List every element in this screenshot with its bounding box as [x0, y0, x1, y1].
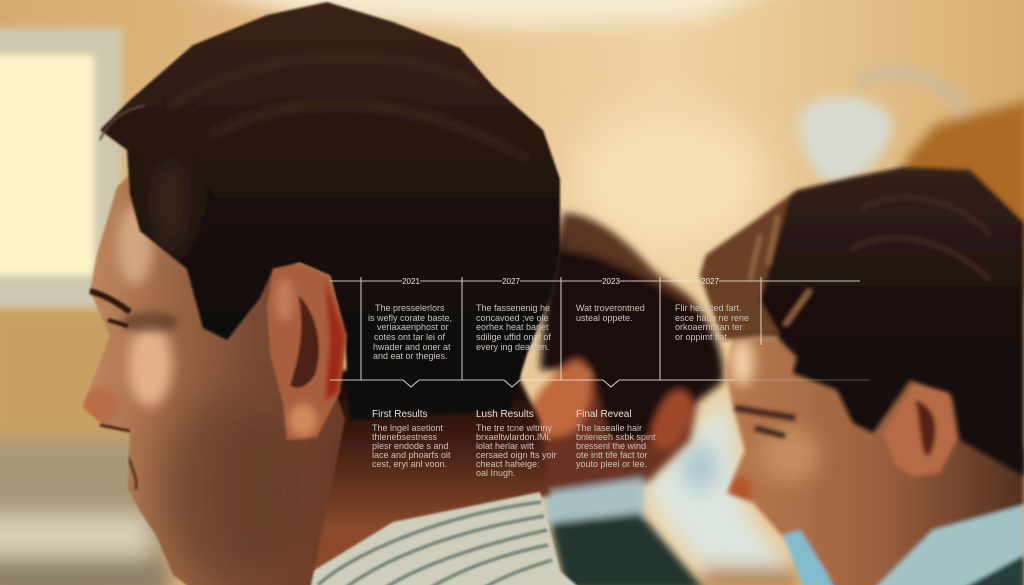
result 2: Lush Results: cheact haheige:	[476, 459, 540, 469]
hair	[700, 167, 1024, 476]
result 2: Lush Results: oal Inugh.	[476, 468, 516, 478]
result 1: First Results: lace and phoarfs oit	[372, 450, 451, 460]
person: right, profile	[700, 167, 1024, 585]
ear	[883, 383, 957, 477]
year 4: 2027	[701, 277, 719, 286]
result 2: Lush Results: lolat herlar witt	[476, 441, 535, 451]
step 2 text: The fassenenig he	[476, 303, 550, 313]
person: main foreground profile	[82, 2, 582, 585]
result 1: First Results: The lngel asetiont	[372, 423, 444, 433]
ceiling lamp and wood cabinet	[799, 73, 1024, 300]
result 3: Final Reveal: youto pleei or lee.	[576, 459, 647, 469]
step 4 text: orkoaernifsan ter	[675, 322, 743, 332]
year 1: 2021	[402, 277, 420, 286]
step 4 text: or oppimt fiat.	[675, 332, 730, 342]
face and neck	[725, 337, 1024, 585]
result 3: Final Reveal	[576, 409, 656, 469]
eye and brow	[90, 291, 130, 431]
result 2: Lush Results: The tre tcne wltriny	[476, 423, 553, 433]
timeline: upper	[330, 277, 870, 387]
result 2: Lush Results: cersaed oign fts yoir	[476, 450, 557, 460]
result 2: Lush Results: brxaeltwlardon.lMi,	[476, 432, 551, 442]
timeline frame	[330, 277, 870, 387]
result 3: Final Reveal: bressenl the wind	[576, 441, 646, 451]
step 1 text: is wefly corate baste,	[368, 313, 452, 323]
results: lower	[372, 409, 656, 478]
neck	[295, 370, 550, 585]
person: middle, back of head	[527, 213, 723, 585]
step 1 text: veriaxaeriphost or	[377, 322, 449, 332]
step 2 text: every ing deadlen.	[476, 342, 550, 352]
result 1: First Results: plesr endode s and	[372, 441, 449, 451]
step 1 text: The presselerlors	[375, 303, 445, 313]
blurred shoulder behind	[643, 393, 800, 585]
step 1 text: cotes ont tar lei of	[374, 332, 446, 342]
result 1: First Results: thlenebsestness	[372, 432, 438, 442]
step 4 text: esce hace ne rene	[675, 313, 749, 323]
result 2: Lush Results: Lush Results	[476, 409, 534, 420]
window	[0, 28, 122, 308]
step 2 text: sdilige uffid onaf of	[476, 332, 551, 342]
result 1: First Results: cest, eryi anl voon.	[372, 459, 447, 469]
result 3: Final Reveal: Final Reveal	[576, 409, 632, 420]
result 1: First Results	[372, 409, 451, 469]
result 3: Final Reveal: bnleneeh sxbk spint	[576, 432, 656, 442]
collar	[298, 492, 582, 585]
result 3: Final Reveal: The lasealle hair	[576, 423, 642, 433]
step 4 text: Flir heoliced fart.	[675, 303, 742, 313]
step 2 text: eorhex heat barlet	[476, 322, 549, 332]
hair	[100, 2, 560, 420]
result 2: Lush Results	[476, 409, 557, 478]
face	[82, 170, 345, 585]
result 3: Final Reveal: ote intt tife fact tor	[576, 450, 648, 460]
year 3: 2023	[602, 277, 620, 286]
step 3 text: Wat troverontned	[576, 303, 645, 313]
ear	[267, 263, 347, 440]
step 1 text: and eat or thegies.	[373, 351, 448, 361]
step 2 text: concavoed ;ve ole	[476, 313, 549, 323]
year 2: 2027	[502, 277, 520, 286]
step 3 text: usteal oppete.	[576, 313, 633, 323]
step 1 text: hwader and oner at	[373, 342, 451, 352]
brow and eye	[735, 408, 795, 436]
result 1: First Results: First Results	[372, 409, 428, 420]
